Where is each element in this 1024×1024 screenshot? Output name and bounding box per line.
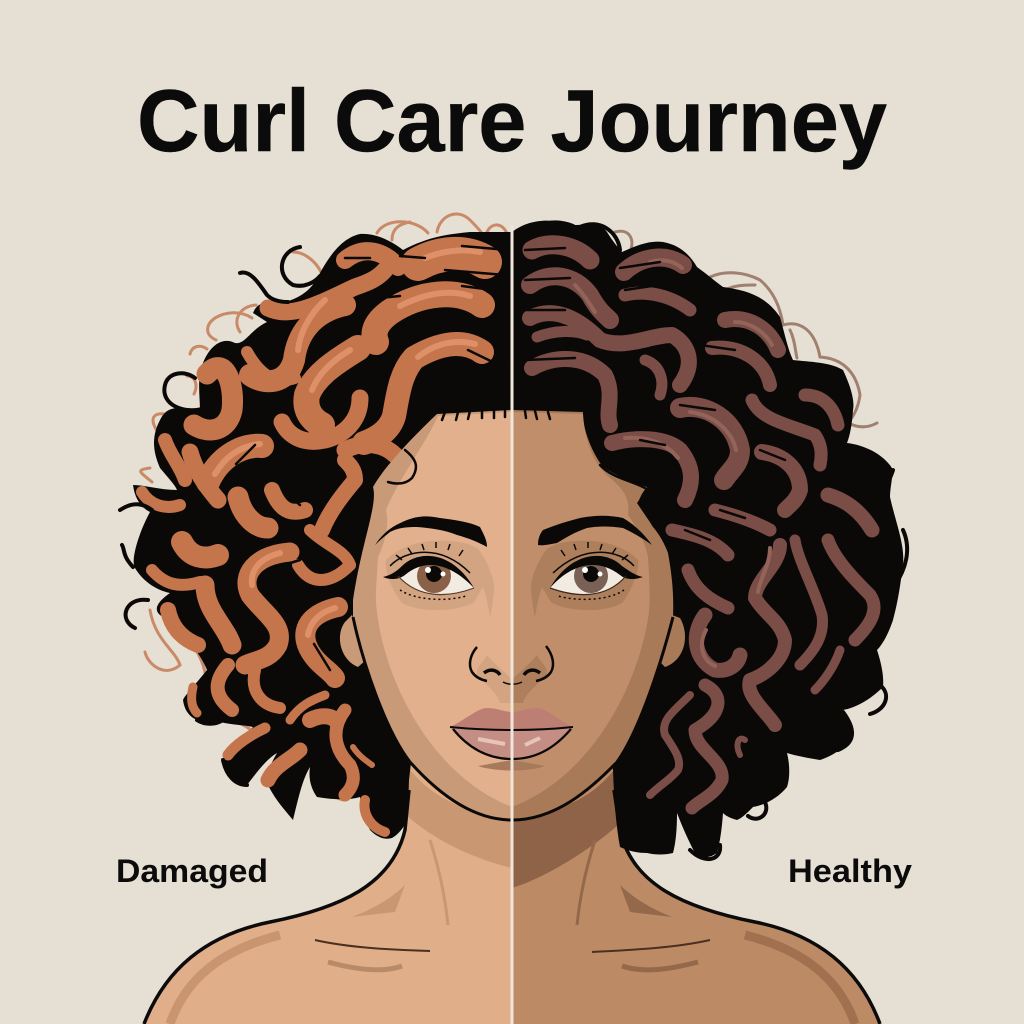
shoulders and neck — [144, 760, 880, 1024]
right skin highlight — [512, 412, 650, 807]
eye shadow, left — [386, 541, 494, 617]
left eyebrow — [375, 516, 487, 547]
silhouette, right — [512, 221, 903, 858]
eye shadow, right — [531, 541, 638, 617]
silhouette, left — [133, 232, 512, 839]
jaw and face outline — [353, 617, 673, 820]
left eye — [383, 542, 474, 599]
left skin highlight — [376, 412, 512, 807]
highlights, right — [575, 260, 772, 666]
copper ribbons, left — [142, 251, 485, 832]
ears — [340, 615, 366, 667]
hairline spikes — [388, 411, 645, 488]
flyaway strands, right — [615, 231, 877, 427]
black curl accents, right — [515, 222, 907, 859]
left face half — [353, 410, 512, 820]
center divider — [510, 225, 514, 1024]
right eye — [550, 542, 643, 599]
right eyebrow — [538, 516, 652, 545]
label: damaged: Damaged — [116, 853, 268, 889]
face — [340, 410, 685, 820]
title: Curl Care Journey — [137, 71, 887, 170]
brown ribbons, right — [530, 245, 874, 808]
hair: damaged side — [120, 214, 512, 839]
lips — [450, 708, 573, 770]
right face half — [512, 410, 673, 820]
label: healthy: Healthy — [788, 853, 912, 889]
nose — [470, 646, 553, 703]
dark strand spikes, left — [236, 246, 508, 670]
highlights, left — [215, 250, 480, 635]
hair: healthy side — [512, 221, 907, 859]
flyaway strands, left — [141, 214, 508, 800]
black curl accents, left — [120, 247, 320, 785]
dark strand spikes, right — [525, 248, 785, 540]
